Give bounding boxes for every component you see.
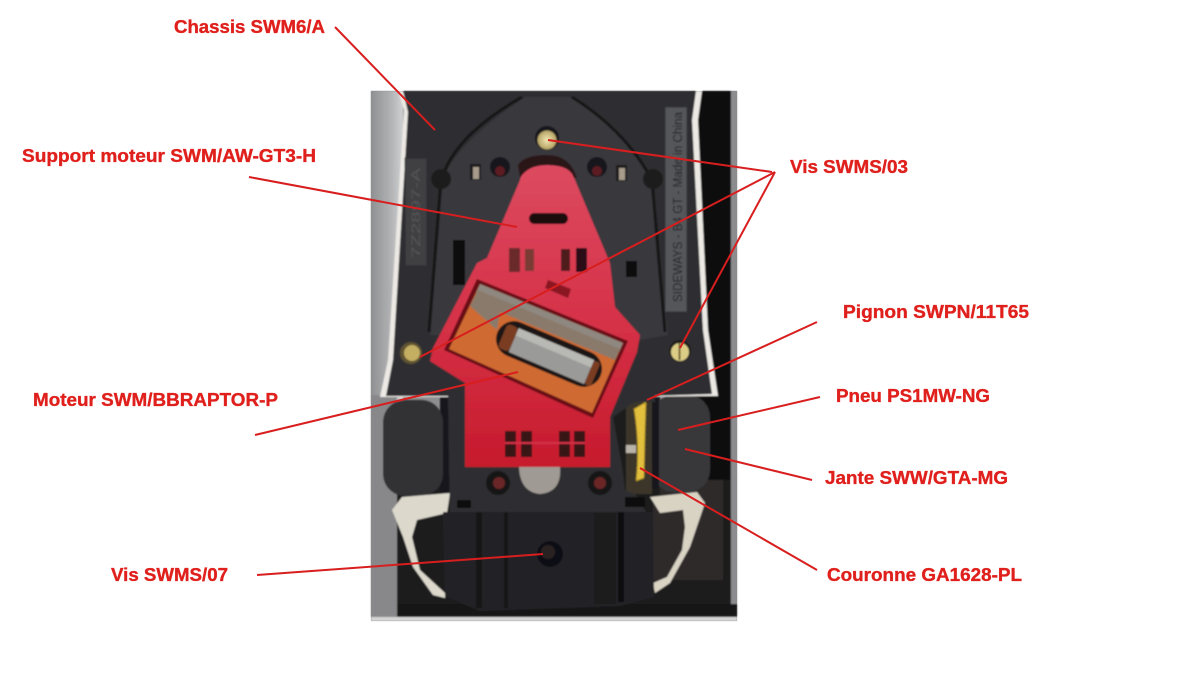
moulded text plates: [405, 107, 687, 312]
rear block: [443, 512, 654, 611]
line: pinion: [647, 322, 817, 400]
line: screw right: [680, 172, 775, 348]
line: rear screw: [257, 554, 543, 575]
line: tyre: [678, 397, 820, 430]
chassis dark plate with wheel cut-outs: [386, 91, 712, 512]
label: motor: Moteur SWM/BBRAPTOR-P: [33, 390, 278, 410]
label: crown gear: Couronne GA1628-PL: [827, 565, 1022, 585]
line: chassis: [335, 27, 435, 130]
photo: underside of slot car chassis: [371, 91, 737, 621]
line: rim: [685, 449, 812, 480]
motor slot and can: [490, 316, 608, 392]
label: screws: Vis SWMS/03: [790, 157, 908, 177]
label: chassis: Chassis SWM6/A: [174, 17, 325, 37]
label: tyre: Pneu PS1MW-NG: [836, 386, 990, 406]
inner plate lighter: [430, 97, 668, 340]
line: motor support: [249, 177, 517, 227]
brass screws: [400, 126, 691, 364]
label: rear screw: Vis SWMS/07: [111, 565, 228, 585]
red motor support: [430, 155, 640, 467]
photo background: steel and black case: [371, 91, 737, 621]
mounting holes: [431, 157, 663, 285]
chassis white edge: [380, 91, 718, 397]
bottom strip under white edge between plate and wheel: [610, 394, 655, 402]
leader lines: [249, 27, 820, 575]
white body lower corners: [392, 492, 705, 598]
moulded text plates: SIDEWAYS - B4 GT - Made in China: [670, 111, 685, 302]
right tyre: [650, 395, 710, 492]
crown gear: [634, 402, 646, 481]
label: pinion: Pignon SWPN/11T65: [843, 302, 1029, 322]
right wheel well shadow: [610, 396, 660, 496]
line: motor: [255, 372, 518, 435]
label: motor support: Support moteur SWM/AW-GT3-H: [22, 146, 316, 166]
orange motor plate: [444, 279, 628, 418]
left tyre: [383, 400, 443, 496]
line: crown gear: [640, 468, 817, 570]
line: screw top: [548, 140, 772, 172]
wheel well shadow: [440, 396, 452, 496]
moulded text plates: 7Z2897-A: [409, 168, 423, 258]
gear well: [626, 402, 652, 494]
rear holes: [457, 467, 645, 508]
chassis arch slots: [429, 97, 665, 332]
pinion hub: [626, 445, 636, 453]
label: rim: Jante SWW/GTA-MG: [825, 468, 1008, 488]
line: screw left: [420, 172, 775, 357]
